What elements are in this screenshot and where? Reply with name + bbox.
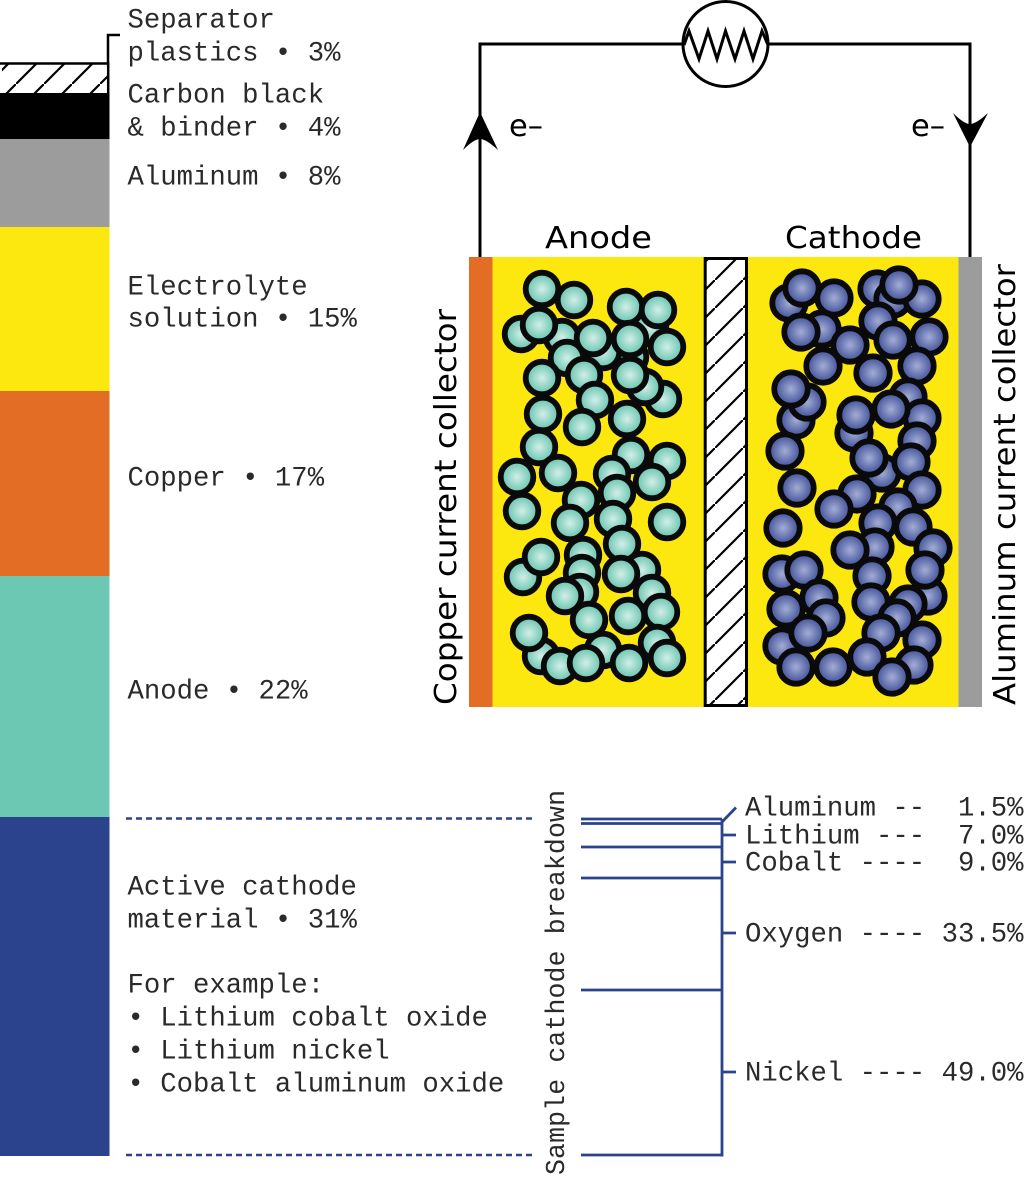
label: copper current collector: Copper current collector bbox=[429, 308, 464, 705]
label: electrolyte solution: solution • 15% bbox=[128, 304, 357, 336]
label: active cathode material: For example: bbox=[128, 970, 324, 1002]
label: electron right: e– bbox=[911, 109, 945, 144]
label: sample cathode breakdown: Sample cathode breakdown bbox=[542, 790, 572, 1175]
segment: separator plastics bbox=[0, 64, 108, 93]
label: active cathode material: • Cobalt aluminum oxide bbox=[128, 1070, 504, 1100]
copper current collector bar bbox=[469, 257, 492, 707]
label: cobalt share: Cobalt ---- 9.0% bbox=[745, 848, 1024, 880]
segment: active cathode material bbox=[0, 817, 110, 1156]
segment: anode bbox=[0, 576, 110, 817]
label: carbon black and binder bbox=[128, 80, 341, 144]
label: electrolyte solution: Electrolyte bbox=[128, 272, 308, 304]
label: separator plastics: Separator bbox=[128, 6, 275, 36]
separator membrane bbox=[705, 258, 746, 706]
label: electron left: e– bbox=[509, 109, 543, 144]
segment: separator outline bbox=[0, 64, 108, 93]
stacked composition bar bbox=[0, 64, 110, 1156]
arrow: electrons up bbox=[463, 112, 498, 150]
panel: battery cell bbox=[469, 257, 982, 707]
label: lithium share: Lithium --- 7.0% bbox=[745, 822, 1024, 852]
electrolyte background bbox=[492, 257, 959, 707]
label: active cathode material: • Lithium nickel bbox=[128, 1036, 390, 1068]
label: nickel share: Nickel ---- 49.0% bbox=[745, 1058, 1024, 1090]
icon: resistor bbox=[683, 2, 768, 86]
cathode particles bbox=[765, 268, 950, 694]
label: anode: Anode • 22% bbox=[128, 676, 308, 708]
heading: cathode: Cathode bbox=[785, 221, 922, 256]
label: carbon black and binder: & binder • 4% bbox=[128, 114, 341, 144]
segment: aluminum bbox=[0, 139, 110, 227]
label: active cathode material: Active cathode bbox=[128, 872, 357, 904]
segment: copper bbox=[0, 391, 110, 576]
circuit wire bbox=[480, 44, 970, 257]
label: aluminum current collector: Aluminum current collector bbox=[988, 263, 1023, 705]
label: separator plastics: plastics • 3% bbox=[128, 38, 341, 70]
label: separator plastics bbox=[128, 6, 341, 70]
label: active cathode material bbox=[128, 872, 504, 1100]
segment: electrolyte bbox=[0, 227, 110, 391]
label: carbon black and binder: Carbon black bbox=[128, 80, 324, 112]
label: copper: Copper • 17% bbox=[128, 464, 325, 494]
segment: carbon black and binder bbox=[0, 93, 110, 139]
label: active cathode material: material • 31% bbox=[128, 906, 357, 936]
separator leader line bbox=[108, 35, 120, 63]
heading: anode: Anode bbox=[545, 221, 652, 256]
arrow: electrons down bbox=[953, 113, 988, 147]
label: electrolyte solution bbox=[128, 272, 357, 336]
anode particles bbox=[501, 273, 683, 682]
label: aluminum share: Aluminum -- 1.5% bbox=[745, 794, 1024, 824]
label: oxygen share: Oxygen ---- 33.5% bbox=[745, 920, 1024, 950]
dashed guide lines bbox=[126, 818, 532, 1155]
label: active cathode material: • Lithium cobalt oxide bbox=[128, 1004, 488, 1034]
label: aluminum: Aluminum • 8% bbox=[128, 162, 341, 194]
aluminum current collector bar bbox=[958, 257, 982, 707]
chart: cathode breakdown bracket bbox=[581, 808, 736, 1156]
